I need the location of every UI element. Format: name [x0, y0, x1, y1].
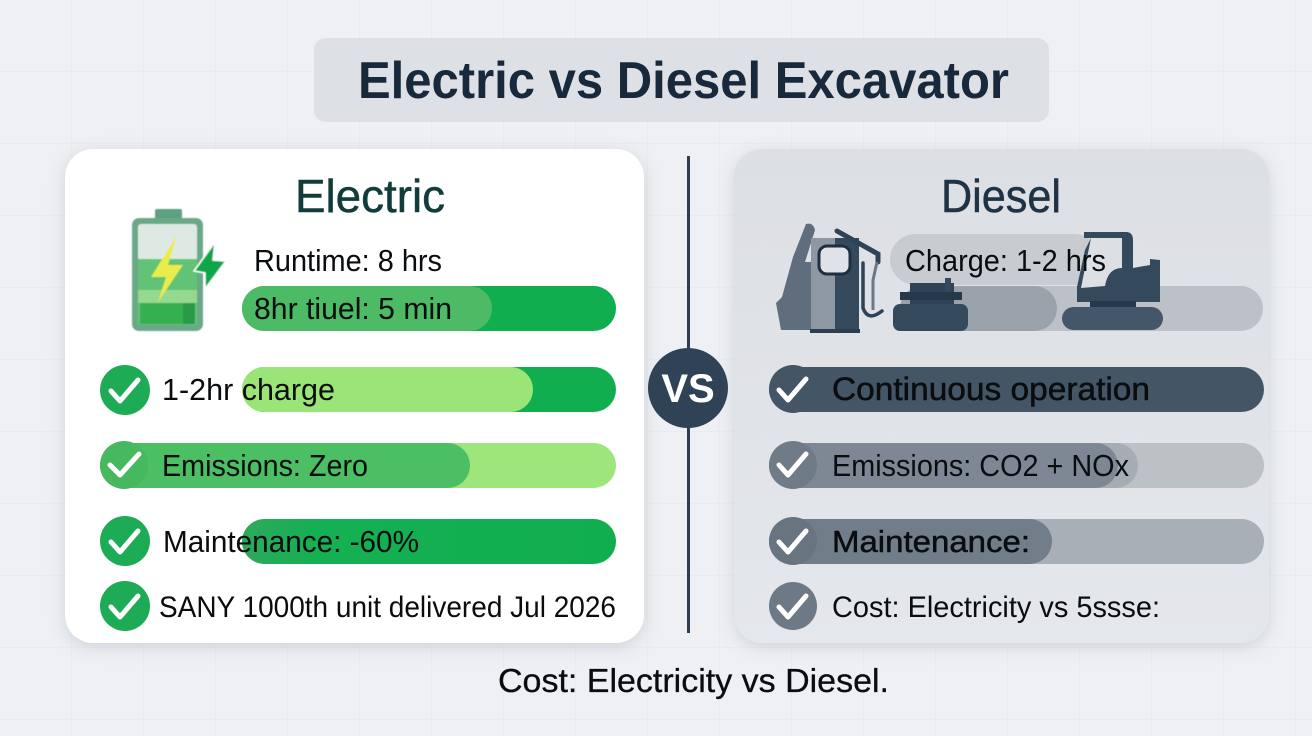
runtime label: Runtime: 8 hrs — [254, 243, 442, 278]
bar: emissions — [769, 441, 1264, 489]
vs badge — [648, 348, 728, 428]
vs badge: VS — [661, 367, 715, 411]
delivery note — [100, 581, 616, 631]
icon: excavator cab — [1062, 232, 1163, 330]
bar: emissions: Emissions: CO2 + NOx — [832, 448, 1129, 483]
cost row — [769, 582, 1160, 630]
panel: electric — [65, 149, 644, 643]
bar: fuel: 8hr tiuel: 5 min — [254, 291, 452, 326]
footer caption: Cost: Electricity vs Diesel. — [498, 662, 889, 699]
bar: maintenance — [100, 516, 616, 566]
check icon — [100, 516, 150, 566]
icon: battery — [132, 209, 226, 331]
icon: compact tracks — [893, 278, 968, 331]
diesel heading: Diesel — [941, 170, 1061, 222]
panel: diesel — [734, 149, 1269, 643]
bar: maintenance: Maintenance: — [832, 524, 1030, 559]
bar: maintenance — [769, 517, 1264, 565]
icon: fuel pump — [810, 231, 882, 333]
cost row: Cost: Electricity vs 5ssse: — [832, 591, 1160, 624]
delivery note: SANY 1000th unit delivered Jul 2026 — [159, 591, 616, 624]
divider line — [687, 156, 690, 633]
bar: maintenance: Maintenance: -60% — [163, 524, 419, 559]
title — [314, 38, 1049, 122]
check icon — [100, 365, 150, 415]
bar: charge — [100, 365, 616, 415]
bar: fuel background — [890, 234, 1263, 331]
electric heading: Electric — [295, 170, 445, 222]
bar: emissions — [100, 441, 616, 489]
charge label: Charge: 1-2 hrs — [905, 243, 1106, 278]
bar: emissions: Emissions: Zero — [162, 448, 368, 483]
bar: continuous operation: Continuous operation — [832, 371, 1150, 407]
bar: fuel — [242, 286, 616, 331]
bar: continuous operation — [769, 365, 1264, 413]
bar: charge: 1-2hr charge — [162, 372, 335, 407]
icon: excavator arm — [776, 224, 815, 330]
title: Electric vs Diesel Excavator — [358, 52, 1009, 110]
